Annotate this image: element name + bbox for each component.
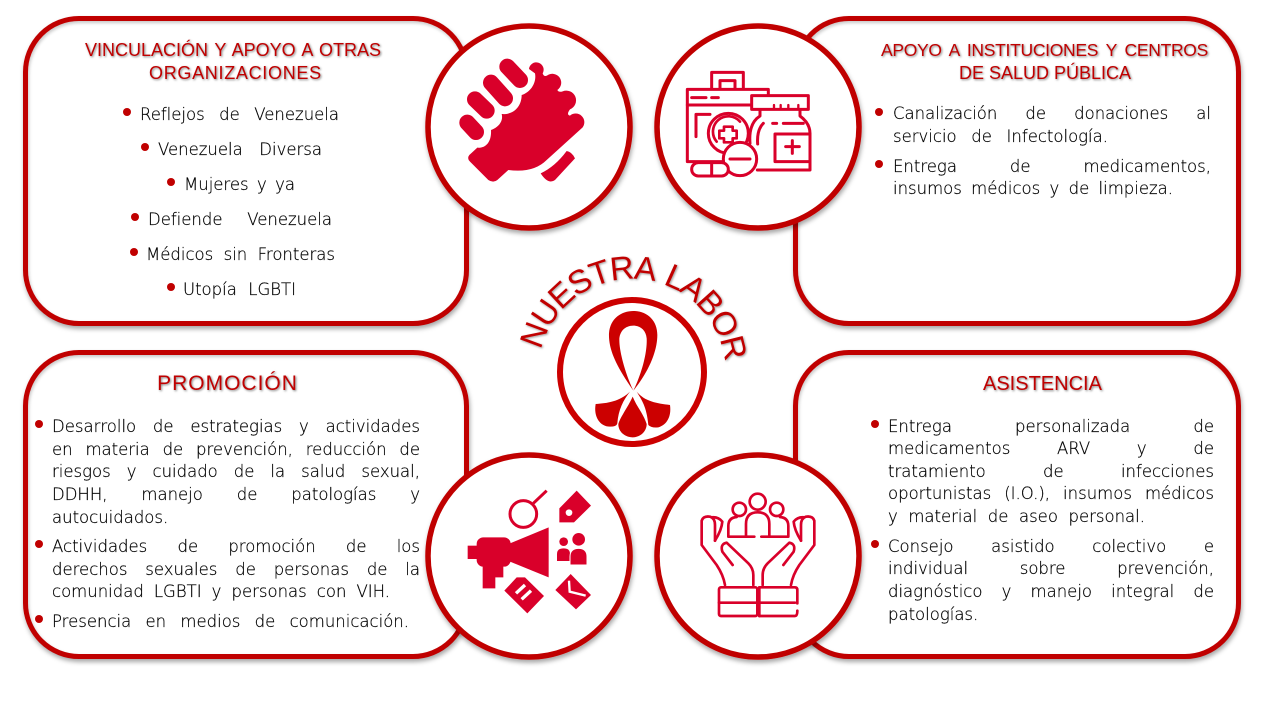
list: apoyos: insumos médicos y de limpieza. (893, 179, 1173, 198)
list: organizaciones: Defiende Venezuela (148, 210, 332, 229)
list: promoción (35, 417, 420, 631)
list: asistencia: oportunistas (I.O.), insumos médicos (888, 484, 1214, 503)
list: promoción: autocuidados. (52, 508, 168, 527)
heading: asistencia: ASISTENCIA (983, 373, 1102, 395)
title: nuestra labor: NUESTRA LABOR (520, 256, 748, 362)
icon: megaphone circle (428, 455, 630, 657)
list: promoción: Desarrollo de estrategias y actividades (52, 417, 420, 436)
list: promoción: riesgos y cuidado de la salud sexual, (52, 462, 420, 481)
panel: apoyo a instituciones y centros de salud pública (791, 16, 1245, 332)
heading: apoyo a instituciones: DE SALUD PÚBLICA (959, 63, 1131, 83)
list: apoyos: servicio de Infectología. (893, 127, 1108, 146)
list: asistencia: y material de aseo personal. (888, 507, 1145, 526)
heading: vinculación: VINCULACIÓN Y APOYO A OTRAS (85, 40, 381, 60)
panel: promoción (21, 350, 473, 665)
list: asistencia: diagnóstico y manejo integral de (888, 582, 1214, 601)
heading: vinculación: ORGANIZACIONES (149, 63, 322, 83)
heading: vinculación (85, 40, 382, 83)
list: organizaciones (123, 105, 339, 299)
list: organizaciones: Médicos sin Fronteras (146, 245, 335, 264)
panel: asistencia (791, 350, 1245, 665)
list: organizaciones: Venezuela Diversa (158, 140, 322, 159)
list: asistencia: patologías. (888, 605, 978, 624)
list: promoción: DDHH, manejo de patologías y (52, 485, 420, 504)
list: promoción: Actividades de promoción de los (52, 537, 420, 556)
list: promoción: Presencia en medios de comunicación. (52, 612, 409, 631)
list: promoción: comunidad LGBTI y personas con VIH. (52, 582, 390, 601)
list: organizaciones: Mujeres y ya (184, 175, 295, 194)
heading: apoyo a instituciones: APOYO A INSTITUCIONES Y CENTROS (881, 40, 1208, 60)
list: promoción: derechos sexuales de personas de la (52, 560, 420, 579)
list: organizaciones: Utopía LGBTI (183, 280, 296, 299)
list: asistencia: individual sobre prevención, (888, 559, 1214, 578)
list: asistencia: Entrega personalizada de (888, 417, 1214, 436)
icon: medical kit circle (657, 26, 859, 228)
list: asistencia: medicamentos ARV y de (888, 439, 1214, 458)
logo: red ribbon in circle (560, 300, 704, 444)
list: asistencia: Consejo asistido colectivo e (888, 537, 1214, 556)
panel: vinculación y apoyo a otras organizaciones (21, 16, 473, 332)
heading: apoyo a instituciones (881, 40, 1210, 83)
list: apoyos (875, 104, 1211, 198)
icon: clasped hands circle (428, 26, 630, 228)
list: asistencia: tratamiento de infecciones (888, 462, 1214, 481)
list: apoyos: Canalización de donaciones al (893, 104, 1211, 123)
list: promoción: en materia de prevención, reducción de (52, 440, 420, 459)
list: organizaciones: Reflejos de Venezuela (140, 105, 339, 124)
list: apoyos: Entrega de medicamentos, (893, 157, 1211, 176)
icon: hands holding people circle (657, 455, 859, 657)
heading: promoción: PROMOCIÓN (157, 372, 298, 395)
list: asistencia (871, 417, 1214, 624)
